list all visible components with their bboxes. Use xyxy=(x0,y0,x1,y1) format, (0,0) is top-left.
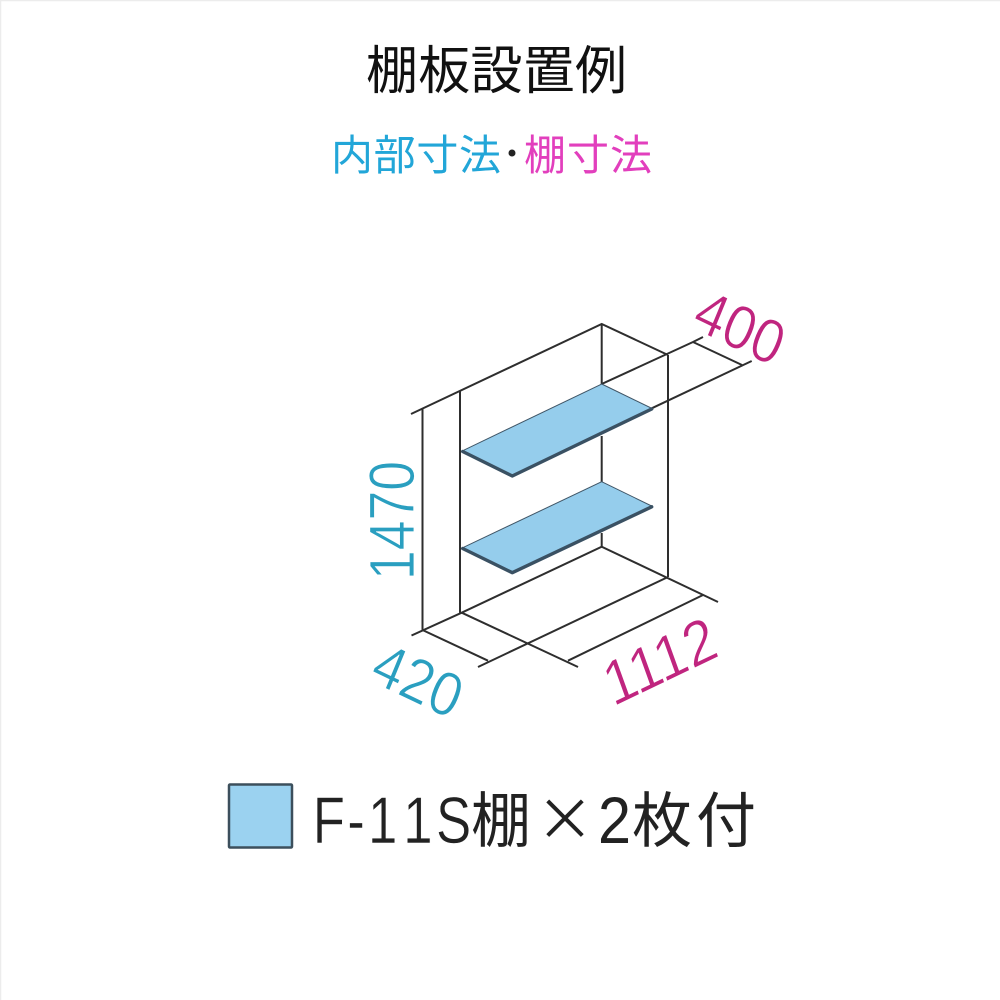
legend text: F-11S xyxy=(313,783,471,857)
legend text: × xyxy=(536,773,594,857)
dimension: width 1112: 1112 xyxy=(594,604,726,720)
dimension: depth 420: 420 xyxy=(363,629,473,733)
legend text: 2 xyxy=(598,783,631,857)
upper shelf xyxy=(463,384,652,476)
dimension: height 1470: 1470 xyxy=(356,461,428,580)
legend text: 枚 xyxy=(632,788,692,855)
title: 棚板設置例 xyxy=(366,43,627,101)
legend xyxy=(229,773,756,857)
lower shelf xyxy=(463,482,652,573)
frame lines xyxy=(411,324,752,667)
subtitle: inner and shelf dimensions xyxy=(331,132,652,179)
dimension: shelf depth 400: 400 xyxy=(685,276,795,380)
subtitle: inner and shelf dimensions: 内部寸法 xyxy=(331,132,501,179)
shelving diagram xyxy=(356,276,795,733)
legend text xyxy=(313,773,756,857)
legend text: 付 xyxy=(696,788,756,855)
legend text: 棚 xyxy=(471,788,531,855)
subtitle: inner and shelf dimensions: 棚寸法 xyxy=(524,132,652,179)
legend swatch xyxy=(229,784,292,848)
